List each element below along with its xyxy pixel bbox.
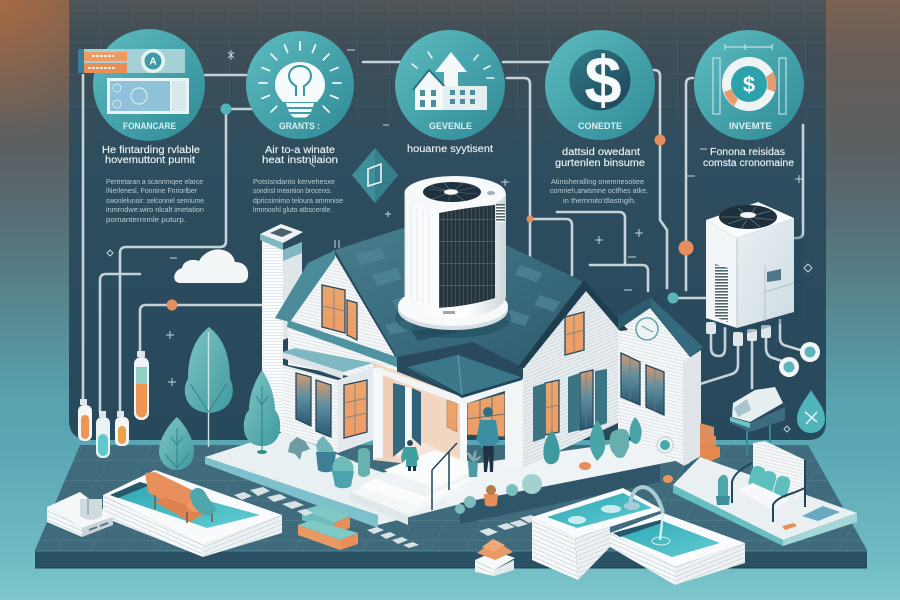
text block: column 4 [550,147,648,205]
porch column right and side [373,368,523,481]
text block: column 2: sondnsl meantion brocerxs. [253,186,332,195]
text block: column 2: dpricsimimo teloura ammnise [253,196,343,205]
tube 1 [78,399,92,441]
roof: right fascia [518,280,628,368]
stacked block [475,539,515,576]
wall: left wing side [338,367,373,453]
text block: column 2: lrmmoohl gluto atbscentle. [253,205,332,214]
roof: left wing ledge [282,348,373,372]
round bush [522,474,542,494]
lower basin [610,513,745,585]
test tubes [78,351,149,458]
valve roundels [779,342,820,377]
tube 3 [115,411,129,446]
text block: column 2: Air to-a winate [265,145,335,156]
pool: fountain double basin [532,487,745,585]
upper basin [532,488,663,580]
icon: house with up arrow [412,52,494,110]
text block: column 5: Fonona reisidas [710,147,785,158]
label: Gevenle: GEVENLE [429,121,472,132]
potted plant on porch [466,450,481,477]
heat pump unit on wall [706,202,802,334]
text block: column 4: in thernmito'dlastngih. [563,196,636,205]
text block: column 1: swonlelunoir: selconnel senriume [106,196,204,205]
crate upper [302,505,350,533]
label: Conedte: CONEDTE [578,121,622,132]
text block: column 4: gurtenlen binsume [555,158,645,169]
shutters [533,369,607,442]
roundel on wall [657,437,673,453]
icon: water drop [797,390,825,433]
wall: right wing [523,290,620,468]
roundel 2 [779,357,799,377]
pipe network [83,62,803,412]
roof: gable edge [275,250,335,322]
shrub: tall leaf one [543,430,560,464]
roof: left fascia [287,320,397,367]
text block: column 3: houarne syytisent [407,144,493,155]
chimney [260,224,303,433]
text block: column 1: pomanternnnle puturp. [106,215,186,224]
sparkles and small glyphs [107,50,812,432]
small shrubs by wall [455,484,518,514]
wall: porch back [373,362,462,470]
text block: column 2: heat instnilaion [262,155,338,166]
pot: left planter [316,436,336,472]
tree: large [185,327,233,447]
text block: column 5: comsta cronomaine [703,158,794,169]
pool: left with sofa [103,470,282,557]
crate lower [298,520,358,550]
shrub: tall leaf two [590,420,605,461]
valve: pipe joints [166,104,771,388]
icon: teal diamond [352,148,398,203]
person: child [401,440,419,471]
floor platform [35,445,867,568]
tree: small front [159,417,194,476]
house [260,224,720,525]
step 4: dollar circle [545,30,655,140]
tube 2 [96,411,110,458]
panel: dark blueprint backdrop [69,0,826,440]
foundation plants [288,417,642,514]
icon: cloud [174,249,248,283]
text block: column 4: dattsid owedant [562,147,640,158]
pot: centre planter [332,456,354,488]
text block: column 4: Atinisheralling onemnesotiee [551,177,644,186]
pot: tall planter [358,448,370,477]
roof: small gable [618,297,703,357]
window mullions [322,288,664,435]
porch window [447,393,505,437]
roof: main [335,228,584,367]
orange steps [700,423,720,466]
text block: column 4: comrieh,arwsmne octfhes atke, [550,186,648,195]
icon: control box on stand [730,387,785,456]
step 2: grants circle [246,31,354,139]
wall: left gable [288,255,397,385]
cactus pot [716,475,730,505]
text block: column 1: He fintarding rvlable [102,145,200,156]
stacked crates [298,505,358,550]
bench with cushions [732,441,805,522]
small orange brick [782,523,797,530]
roof: shingle accents [355,248,560,341]
text block: column 2: Potsisndanto kervehesxe [253,177,335,186]
label: Invemte: INVEMTE [729,121,772,132]
tube 4 [134,351,149,420]
text block: column 1: iNerlenesl, Fonnine Fnriorlber [106,186,197,195]
wall: left wing front [283,365,338,453]
pot: orange planter [484,485,498,506]
book [802,506,840,521]
heat pump unit on roof [395,176,511,338]
text block: column 2 [253,145,343,214]
icon: light bulb with rays [259,42,341,118]
wall: small gable wing [618,305,690,465]
text block: column 5 [703,147,794,169]
step 3: government circle [395,30,505,140]
windows [296,285,664,438]
step 1: finance circle [78,29,205,141]
slab: front yard terrace [205,432,680,528]
porch floor [393,438,470,478]
text block: column 1: inmrndwe:wiro nlcalt imetation [106,205,204,214]
icon: voucher and banknote: A [149,56,157,68]
platform: right seating area [673,441,857,546]
person: adult [476,407,499,472]
roof: porch [377,355,523,405]
label: Fonancare: FONANCARE [123,121,176,132]
small orange stone by platform [663,475,673,483]
orange stone [579,462,591,470]
railing and steps [350,443,480,525]
shrub: leaf by corner [630,417,642,444]
door [393,383,421,457]
icon: dollar sign: $ [584,43,622,118]
text block: column 1: hovemuttont pumit [105,155,195,166]
stepping stones [234,487,540,548]
sofa [145,472,217,523]
fountain jet [624,487,670,545]
clock [636,318,658,340]
text block: column 1: Pertretaran a scanrimqee elarce [106,177,203,186]
step 5: investment circle [694,30,804,140]
pump block beside pool [47,492,113,537]
icon: coin ring: $ [743,72,755,97]
shrub beside terrace [288,437,310,460]
shrub: round cluster [610,429,629,458]
text block: column 1 [102,145,204,224]
tree: beside house [244,370,280,454]
roundel 1 [800,342,820,362]
label: Grants: GRANTS : [279,121,320,132]
